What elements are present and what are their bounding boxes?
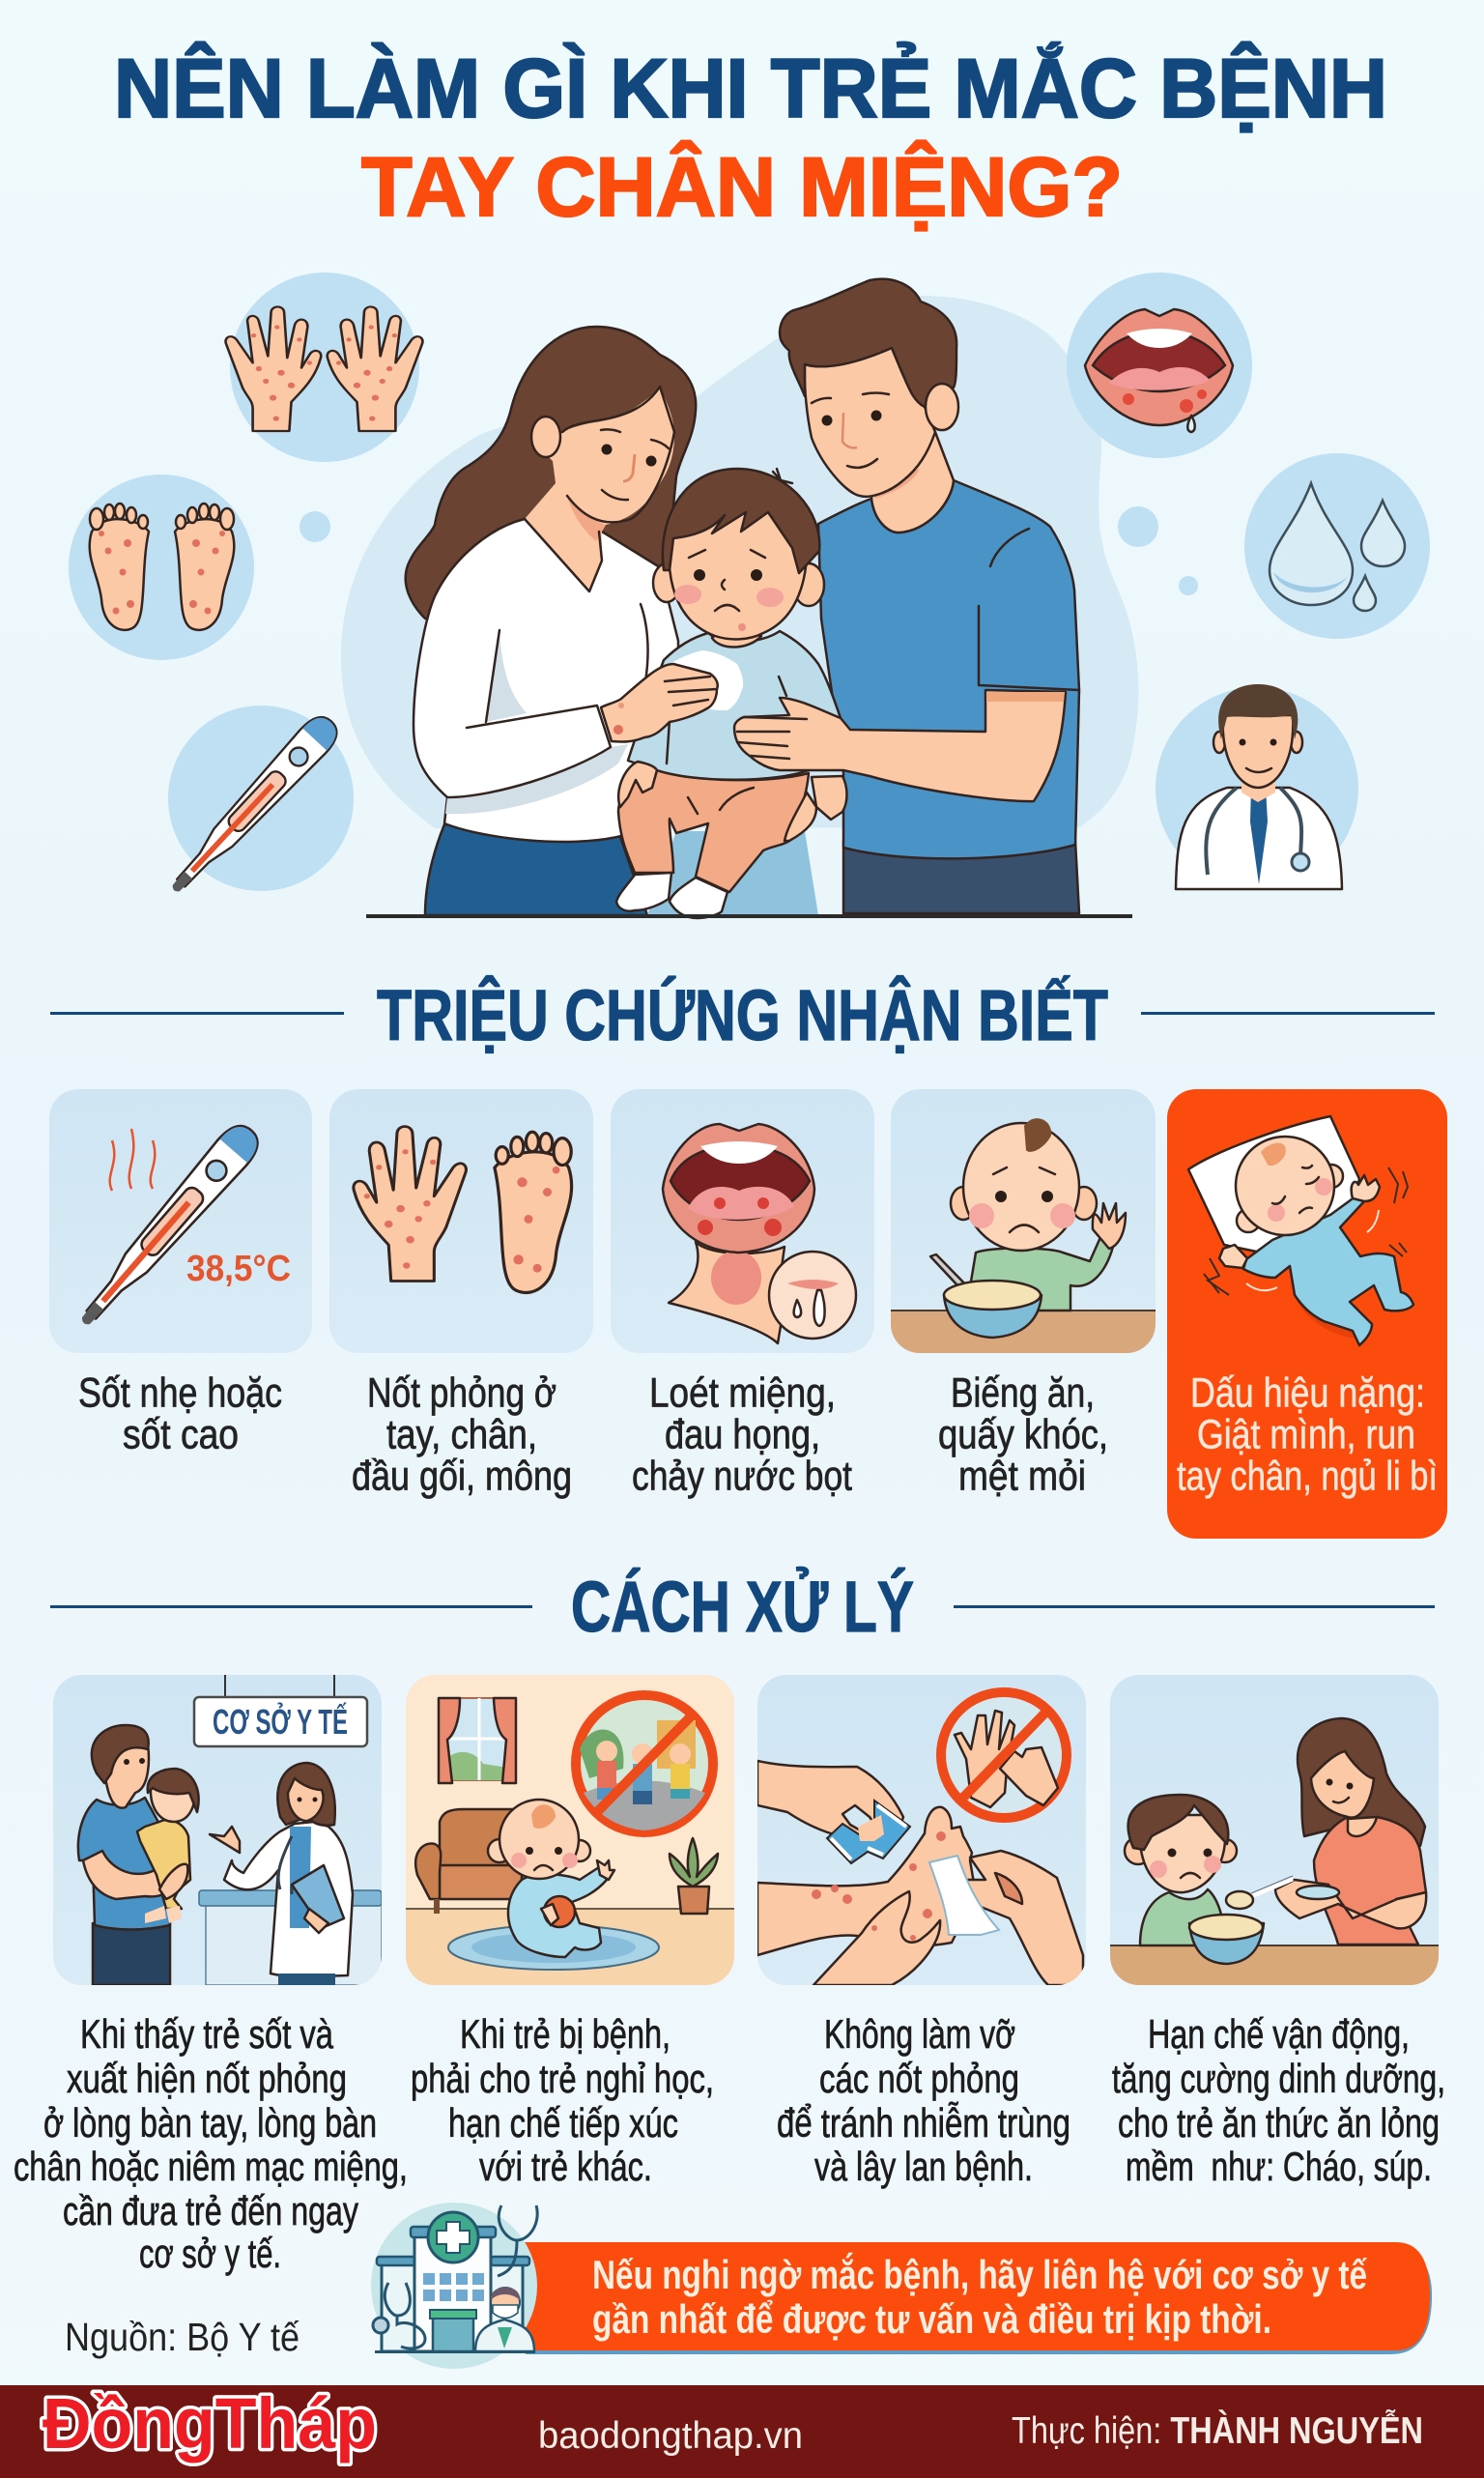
- panel: symptom fever: [49, 1089, 312, 1353]
- title: NÊN LÀM GÌ KHI TRẺ MẮC BỆNH: [114, 43, 1387, 135]
- panel: keep child home: [406, 1675, 734, 1985]
- title: TAY CHÂN MIỆNG?: [361, 141, 1123, 234]
- icon: doctor: [1156, 684, 1358, 890]
- callout: contact health facility: gần nhất để được tư vấn và điều trị kịp thời.: [592, 2296, 1271, 2342]
- title: [114, 43, 1387, 234]
- child: [601, 469, 1066, 918]
- symptom captions: Nốt phỏng ở: [367, 1370, 556, 1417]
- symptom captions: đầu gối, mông: [352, 1454, 572, 1500]
- panel: go to clinic: [53, 1675, 382, 1985]
- man: [780, 279, 1079, 913]
- treatment captions: xuất hiện nốt phỏng: [67, 2056, 347, 2101]
- icon: thermometer: [161, 706, 354, 902]
- panel: symptom fever: 38,5°C: [186, 1249, 291, 1289]
- callout: contact health facility: [522, 2242, 1432, 2354]
- treatment captions: hạn chế tiếp xúc: [448, 2100, 678, 2146]
- symptom captions: Sốt nhẹ hoặc: [78, 1370, 282, 1417]
- heading: treatment: [50, 1567, 1435, 1647]
- treatment captions: ở lòng bàn tay, lòng bàn: [43, 2100, 377, 2146]
- footer logo: ĐồngTháp: [43, 2383, 377, 2464]
- symptom captions: quấy khóc,: [938, 1411, 1108, 1457]
- hero illustration: parents holding sick child: [341, 279, 1138, 918]
- treatment captions: với trẻ khác.: [479, 2144, 652, 2189]
- footer credit: Thực hiện: THÀNH NGUYỄN: [1012, 2409, 1423, 2452]
- treatment captions: Hạn chế vận động,: [1148, 2011, 1410, 2057]
- treatment captions: Không làm vỡ: [824, 2011, 1015, 2057]
- icon: hands with rash: [226, 273, 422, 462]
- footer website: baodongthap.vn: [538, 2415, 803, 2457]
- treatment captions: cơ sở y tế.: [139, 2231, 281, 2276]
- icon: feet with rash: [69, 475, 254, 660]
- symptom captions: Biếng ăn,: [951, 1370, 1095, 1417]
- icon: mouth ulcers: [1067, 273, 1252, 458]
- treatment captions: và lây lan bệnh.: [814, 2144, 1033, 2189]
- treatment captions: chân hoặc niêm mạc miệng,: [14, 2144, 408, 2189]
- panel: do not pop blisters: [757, 1675, 1086, 1985]
- icon: water drops: [1244, 453, 1430, 639]
- symptom captions: Giật mình, run: [1197, 1411, 1415, 1457]
- symptom captions: tay, chân,: [386, 1411, 537, 1457]
- treatment captions: Khi trẻ bị bệnh,: [460, 2011, 671, 2057]
- woman: [406, 327, 818, 915]
- symptom captions: đau họng,: [665, 1411, 820, 1457]
- heading: treatment: CÁCH XỬ LÝ: [571, 1567, 914, 1647]
- symptom captions: mệt mỏi: [958, 1454, 1086, 1500]
- treatment captions: để tránh nhiễm trùng: [777, 2100, 1070, 2146]
- panel: symptom blisters: [329, 1089, 593, 1353]
- panel: severe sign: [1167, 1089, 1447, 1539]
- heading: symptoms: [50, 975, 1435, 1055]
- symptom captions: Dấu hiệu nặng:: [1190, 1370, 1425, 1417]
- symptom captions: sốt cao: [123, 1411, 239, 1457]
- treatment captions: cần đưa trẻ đến ngay: [63, 2188, 358, 2233]
- decorative bubbles: [300, 506, 1198, 595]
- symptom captions: [78, 1370, 1438, 1500]
- treatment captions: phải cho trẻ nghỉ học,: [411, 2056, 714, 2101]
- symptom captions: Loét miệng,: [649, 1370, 836, 1417]
- panel: symptom poor appetite: [891, 1089, 1156, 1353]
- heading: symptoms: TRIỆU CHỨNG NHẬN BIẾT: [377, 975, 1108, 1055]
- panel: nutrition and rest: [1110, 1675, 1439, 1985]
- panel: symptom mouth ulcers: [611, 1089, 874, 1353]
- panel: go to clinic: CƠ SỞ Y TẾ: [213, 1701, 348, 1742]
- symptom captions: chảy nước bọt: [632, 1454, 852, 1500]
- treatment captions: Khi thấy trẻ sốt và: [80, 2011, 333, 2057]
- source note: Nguồn: Bộ Y tế: [65, 2315, 300, 2359]
- treatment captions: [14, 2011, 1445, 2276]
- treatment captions: các nốt phỏng: [819, 2056, 1019, 2101]
- icon: hospital: [371, 2203, 537, 2369]
- footer bar: [0, 2383, 1484, 2478]
